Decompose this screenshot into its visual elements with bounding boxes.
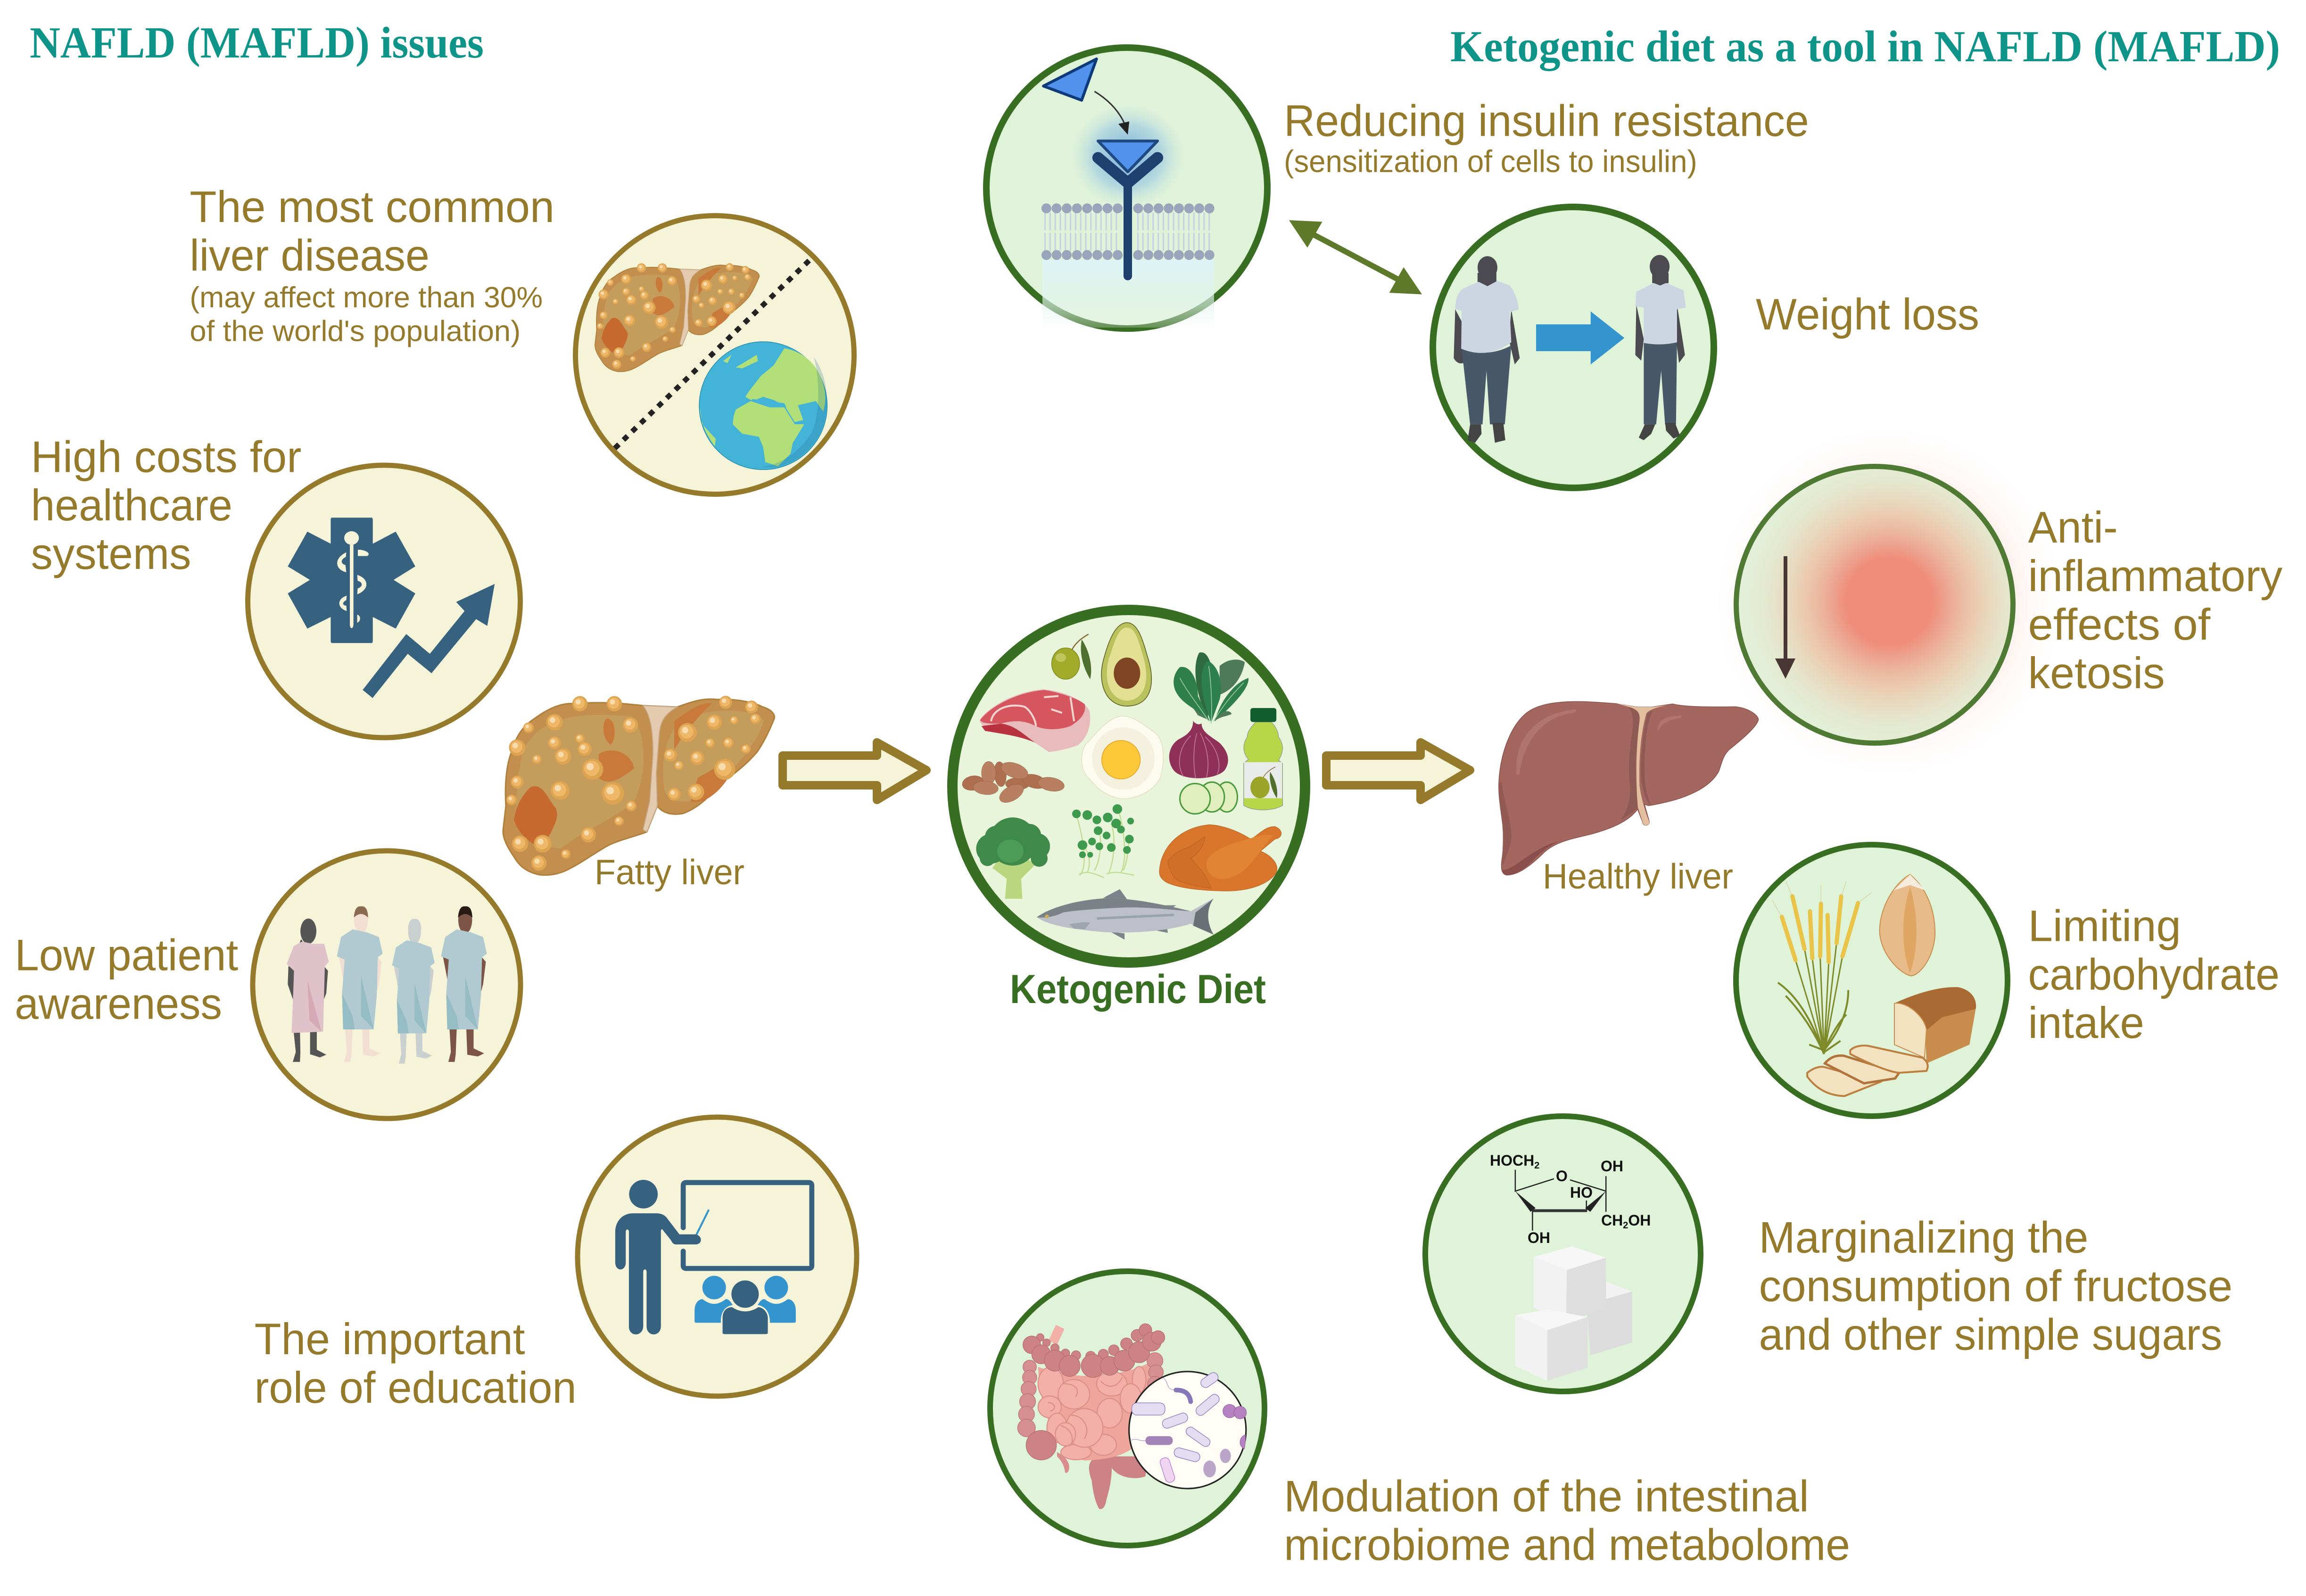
text: modulation of microbiome: Modulation of the intestinal — [1284, 1472, 1809, 1521]
text: modulation of microbiome — [1284, 1472, 1850, 1570]
text: reducing insulin resistance — [1284, 96, 1809, 179]
icon: pointer — [696, 1210, 709, 1235]
text: weight loss: Weight loss — [1756, 289, 1979, 339]
text: anti-inflammatory: Anti- — [2028, 502, 2118, 552]
icon: sprouts — [1072, 804, 1134, 878]
heading: NAFLD issues: NAFLD (MAFLD) issues — [30, 18, 484, 67]
icon: fried egg — [1082, 716, 1163, 799]
text: reducing insulin resistance: Reducing insulin resistance — [1284, 96, 1809, 146]
icon: arrow — [1536, 312, 1624, 364]
illustration: healthy liver — [1499, 701, 1758, 896]
icon: intestines — [1017, 1324, 1165, 1509]
heading: ketogenic diet tool: Ketogenic diet as a tool in NAFLD (MAFLD) — [1450, 22, 2280, 71]
icon: roast chicken — [1159, 825, 1281, 891]
text: role of education: The important — [255, 1314, 525, 1364]
icon: almonds — [961, 759, 1066, 806]
icon: dotted divider — [615, 259, 810, 448]
icon: red onion — [1169, 721, 1228, 778]
icon: fructose molecule: OH — [1628, 1212, 1651, 1229]
text: low patient awareness — [15, 930, 238, 1028]
text: marginalizing fructose: consumption of fructose — [1759, 1261, 2232, 1311]
icon: fructose molecule: 2 — [1623, 1220, 1628, 1231]
panel: weight loss — [1433, 207, 1714, 488]
panel: anti-inflammatory effects — [1715, 427, 2064, 776]
text: anti-inflammatory: inflammatory — [2028, 551, 2282, 601]
panel: ketogenic diet foods — [952, 610, 1305, 1012]
text: most common liver disease: of the world's population) — [190, 315, 521, 348]
text: anti-inflammatory: effects of — [2028, 600, 2211, 649]
text: most common liver disease: The most common — [190, 182, 554, 231]
text: low patient awareness: awareness — [15, 979, 222, 1028]
icon: steak — [980, 689, 1090, 752]
icon: wheat — [1772, 881, 1872, 1054]
icon: fructose molecule: O — [1556, 1168, 1568, 1185]
text: reducing insulin resistance: (sensitization of cells to insulin) — [1284, 144, 1697, 179]
text: marginalizing fructose: Marginalizing the — [1759, 1213, 2088, 1262]
label: healthy liver: Healthy liver — [1543, 856, 1733, 896]
panel: low patient awareness — [253, 851, 521, 1119]
text: limiting carbohydrate: Limiting — [2028, 901, 2181, 950]
icon: audience — [694, 1276, 796, 1334]
panel: limiting carbohydrate intake — [1736, 845, 2008, 1116]
text: high costs: High costs for — [31, 432, 301, 481]
text: high costs: systems — [31, 529, 191, 578]
text: limiting carbohydrate — [2028, 901, 2280, 1047]
text: low patient awareness: Low patient — [15, 930, 238, 980]
text: anti-inflammatory — [2028, 502, 2282, 698]
text: most common liver disease — [190, 182, 554, 348]
arrow: double headed — [1289, 220, 1422, 295]
panel: role of education — [578, 1117, 857, 1396]
panel: fructose and sugars — [1425, 1116, 1701, 1391]
icon: cucumber slices — [1180, 782, 1237, 814]
icon: fructose molecule: HOCH — [1490, 1152, 1534, 1169]
icon: fructose molecule — [1490, 1152, 1651, 1246]
icon: microbiome inset — [1129, 1371, 1247, 1489]
icon: fructose molecule: OH — [1528, 1229, 1550, 1246]
icon: olive oil bottle — [1244, 708, 1282, 810]
icon: patient dark skin — [441, 906, 487, 1062]
icon: sugar cubes — [1515, 1246, 1632, 1381]
icon: teacher — [615, 1180, 701, 1334]
icon: fructose molecule: OH — [1601, 1158, 1623, 1175]
text: most common liver disease: (may affect more than 30% — [190, 281, 543, 314]
icon: person after — [1636, 255, 1686, 440]
icon: patient grey — [392, 919, 435, 1063]
text: limiting carbohydrate: carbohydrate — [2028, 949, 2280, 999]
icon: patient fair skin — [337, 906, 383, 1062]
text: modulation of microbiome: microbiome and metabolome — [1284, 1520, 1850, 1570]
panel: reducing insulin resistance — [986, 48, 1267, 329]
icon: inflammation glow — [1715, 427, 2064, 776]
icon: avocado — [1101, 623, 1151, 706]
icon: fructose molecule: HO — [1570, 1184, 1593, 1201]
text: marginalizing fructose — [1759, 1213, 2232, 1359]
panel: most common liver disease — [575, 216, 854, 494]
icon: person before — [1454, 256, 1520, 443]
icon: star of life and rising arrow — [288, 518, 495, 698]
icon: grain — [1880, 874, 1935, 976]
icon: cell membrane — [1042, 208, 1214, 328]
label: ketogenic diet: Ketogenic Diet — [1010, 967, 1266, 1012]
label: fatty liver: Fatty liver — [595, 852, 744, 892]
icon: earth globe — [699, 342, 827, 469]
illustration: fatty liver — [503, 696, 775, 892]
text: anti-inflammatory: ketosis — [2028, 648, 2165, 698]
icon: insulin receptor — [1043, 59, 1185, 276]
icon: fructose molecule: 2 — [1534, 1160, 1539, 1171]
icon: spinach — [1174, 652, 1248, 724]
text: high costs: healthcare — [31, 480, 232, 530]
text: high costs — [31, 432, 301, 578]
text: limiting carbohydrate: intake — [2028, 998, 2144, 1047]
panel: high healthcare costs — [248, 465, 521, 738]
text: role of education: role of education — [255, 1363, 577, 1412]
icon: patient in pink gown — [287, 919, 329, 1062]
icon: small fatty liver — [595, 263, 759, 371]
arrow: diet to healthy liver — [1326, 742, 1470, 800]
text: marginalizing fructose: and other simple sugars — [1759, 1310, 2222, 1359]
icon: broccoli — [976, 817, 1050, 899]
icon: down arrow — [1775, 556, 1795, 679]
text: most common liver disease: liver disease — [190, 230, 430, 280]
panel: intestinal microbiome — [990, 1271, 1265, 1546]
icon: fish — [1037, 889, 1214, 939]
icon: bread loaf — [1807, 987, 1976, 1096]
arrow: fatty liver to diet — [783, 742, 926, 800]
icon: fructose molecule: CH — [1601, 1212, 1623, 1229]
icon: olive — [1052, 634, 1091, 679]
icon: whiteboard — [683, 1183, 812, 1268]
text: role of education — [255, 1314, 577, 1412]
